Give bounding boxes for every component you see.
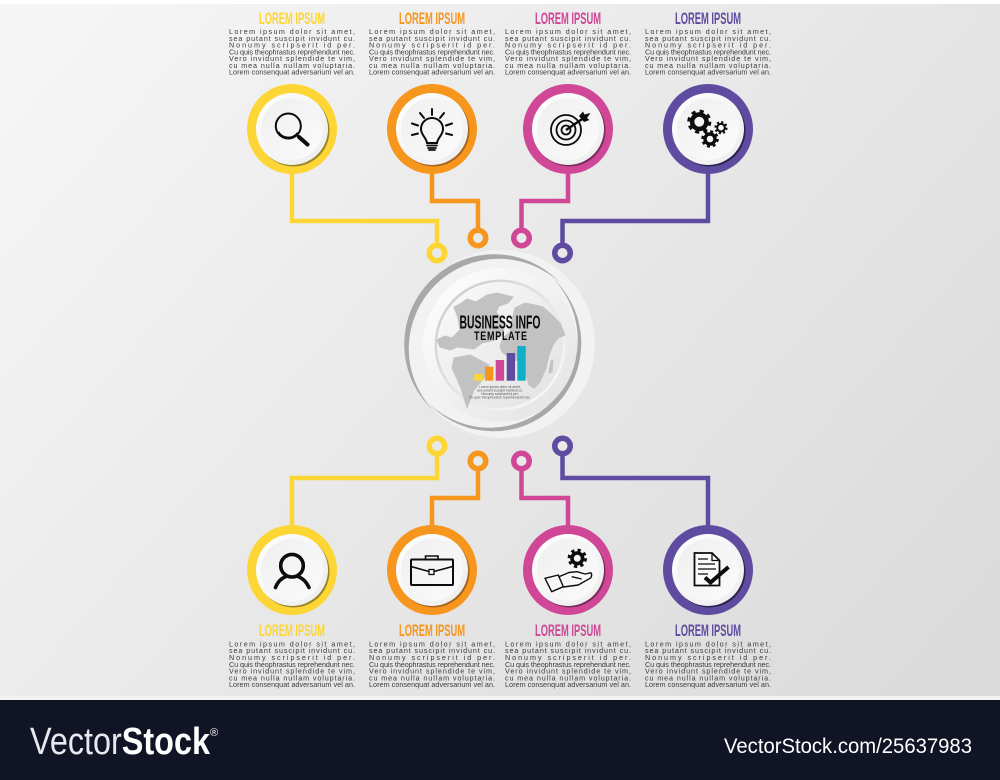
text block: top 2: Lorem ipsum dolor sit amet,	[369, 27, 495, 36]
node: briefcase	[387, 525, 477, 615]
icon: target and arrow	[551, 112, 590, 145]
text block: bottom 1: cu mea nulla nullam voluptaria.	[229, 673, 355, 682]
headings: bottom row	[259, 622, 741, 640]
headings: top row: LOREM IPSUM	[259, 10, 325, 28]
text block: top 2	[369, 27, 495, 76]
node: target	[523, 84, 613, 174]
text block: top 3: Lorem ipsum dolor sit amet,	[505, 27, 631, 36]
text block: bottom 1	[229, 640, 355, 689]
text block: top 2: Lorem consenquat adversarium vel an.	[369, 68, 495, 76]
headings: top row: LOREM IPSUM	[675, 10, 741, 28]
text block: bottom 4: sea putant suscipit invidunt cu.	[645, 646, 771, 655]
text block: bottom 3: Lorem ipsum dolor sit amet,	[505, 640, 631, 648]
text block: top 2: sea putant suscipit invidunt cu.	[369, 34, 495, 43]
node: service hand	[523, 525, 613, 615]
text block: top 3: Lorem consenquat adversarium vel an.	[505, 68, 631, 76]
text block: bottom 4: cu mea nulla nullam voluptaria.	[645, 673, 771, 682]
hub caption: Nonumy scripserit id per.	[481, 392, 519, 396]
text block: top 2: Nonumy scripserit id per.	[369, 40, 495, 50]
text block: bottom 4: Nonumy scripserit id per.	[645, 653, 771, 662]
text block: bottom 2: Vero invidunt splendide te vim,	[369, 666, 495, 676]
text block: top 1: cu mea nulla nullam voluptaria.	[229, 61, 355, 70]
registered mark: ®	[210, 727, 218, 739]
node: document check	[663, 525, 753, 615]
text block: top 3: Vero invidunt splendide te vim,	[505, 54, 631, 63]
hub caption: sea putant suscipit invidunt cu.	[477, 388, 523, 392]
node: person	[247, 525, 337, 615]
footer id: VectorStock.com/25637983	[724, 735, 972, 758]
footer logo: VectorStock	[30, 721, 211, 763]
text block: top 1: Lorem consenquat adversarium vel an.	[229, 68, 355, 76]
text block: bottom 3: cu mea nulla nullam voluptaria.	[505, 673, 631, 682]
headings: bottom row: LOREM IPSUM	[675, 622, 741, 640]
icon: light bulb	[412, 109, 452, 150]
node: settings	[663, 84, 753, 174]
text block: top 3: Cu quis theophrastus reprehendunt nec.	[505, 47, 631, 56]
headings: bottom row: LOREM IPSUM	[535, 622, 601, 640]
text block: bottom 3: sea putant suscipit invidunt cu.	[505, 646, 631, 655]
text block: bottom 2: Lorem ipsum dolor sit amet,	[369, 640, 495, 648]
subtitle: TEMPLATE	[474, 331, 527, 343]
text block: top 4: cu mea nulla nullam voluptaria.	[645, 61, 771, 70]
text block: bottom 2: Cu quis theophrastus reprehendunt nec.	[369, 660, 495, 669]
text block: top 1: Lorem ipsum dolor sit amet,	[229, 27, 355, 36]
text block: top 3: sea putant suscipit invidunt cu.	[505, 34, 631, 43]
text block: bottom 3: Lorem consenquat adversarium vel an.	[505, 680, 631, 689]
node: search	[247, 84, 337, 174]
text block: bottom 1: Vero invidunt splendide te vim,	[229, 666, 355, 676]
text block: bottom 2: Lorem consenquat adversarium vel an.	[369, 680, 495, 689]
text block: top 4: sea putant suscipit invidunt cu.	[645, 34, 771, 43]
text block: bottom 1: Cu quis theophrastus reprehendunt nec.	[229, 660, 355, 669]
text block: bottom 4: Lorem ipsum dolor sit amet,	[645, 640, 771, 648]
text block: top 3: cu mea nulla nullam voluptaria.	[505, 61, 631, 70]
text block: bottom 2: sea putant suscipit invidunt cu.	[369, 646, 495, 655]
text block: bottom 1: Nonumy scripserit id per.	[229, 653, 355, 662]
icon: gears	[689, 111, 727, 146]
title: BUSINESS INFO	[460, 312, 540, 332]
bar chart	[474, 346, 526, 381]
text block: top 1: sea putant suscipit invidunt cu.	[229, 34, 355, 43]
text block: bottom 1: sea putant suscipit invidunt cu.	[229, 646, 355, 655]
text block: bottom 1: Lorem consenquat adversarium vel an.	[229, 680, 355, 689]
text block: top 1: Cu quis theophrastus reprehendunt nec.	[229, 47, 355, 56]
text block: top 4: Cu quis theophrastus reprehendunt nec.	[645, 47, 771, 56]
text block: top 1	[229, 27, 355, 76]
text block: top 3	[505, 27, 631, 76]
hub caption: Cu quis theophrastus reprehendunt nec.	[469, 396, 531, 400]
text block: bottom 4: Vero invidunt splendide te vim,	[645, 666, 771, 676]
text block: bottom 3	[505, 640, 631, 689]
text block: bottom 4: Cu quis theophrastus reprehendunt nec.	[645, 660, 771, 669]
text block: top 4	[645, 27, 771, 76]
footer bar	[0, 696, 1000, 780]
connectors: top	[292, 170, 708, 245]
text block: top 1: Vero invidunt splendide te vim,	[229, 54, 355, 63]
text block: bottom 3: Nonumy scripserit id per.	[505, 653, 631, 662]
text block: bottom 1: Lorem ipsum dolor sit amet,	[229, 640, 355, 648]
text block: top 2: cu mea nulla nullam voluptaria.	[369, 61, 495, 70]
text block: bottom 3: Vero invidunt splendide te vim,	[505, 666, 631, 676]
central hub	[404, 250, 595, 438]
text block: bottom 3: Cu quis theophrastus reprehendunt nec.	[505, 660, 631, 669]
headings: top row	[259, 10, 741, 28]
text block: top 4: Lorem consenquat adversarium vel an.	[645, 68, 771, 76]
text block: bottom 2: Nonumy scripserit id per.	[369, 653, 495, 662]
icon: person	[276, 554, 309, 588]
hub caption: Lorem ipsum dolor sit amet,	[479, 385, 521, 389]
icon: briefcase	[411, 556, 453, 585]
headings: bottom row: LOREM IPSUM	[259, 622, 325, 640]
text block: top 4: Vero invidunt splendide te vim,	[645, 54, 771, 63]
text block: bottom 4	[645, 640, 771, 689]
text block: top 4: Nonumy scripserit id per.	[645, 40, 771, 50]
headings: top row: LOREM IPSUM	[399, 10, 465, 28]
text block: top 4: Lorem ipsum dolor sit amet,	[645, 27, 771, 36]
headings: bottom row: LOREM IPSUM	[399, 622, 465, 640]
text block: bottom 4: Lorem consenquat adversarium vel an.	[645, 680, 771, 689]
node: idea	[387, 84, 477, 174]
text block: bottom 2: cu mea nulla nullam voluptaria.	[369, 673, 495, 682]
text block: bottom 2	[369, 640, 495, 689]
connectors: bottom	[292, 455, 708, 528]
text block: top 3: Nonumy scripserit id per.	[505, 40, 631, 50]
headings: top row: LOREM IPSUM	[535, 10, 601, 28]
icon: document with check	[694, 553, 728, 586]
hub caption	[469, 385, 531, 400]
text block: top 2: Cu quis theophrastus reprehendunt nec.	[369, 47, 495, 56]
text block: top 2: Vero invidunt splendide te vim,	[369, 54, 495, 63]
globe	[437, 282, 565, 408]
icon: magnifier	[276, 114, 308, 144]
icon: hand with gear	[545, 550, 592, 592]
connector end rings	[429, 230, 570, 469]
text block: top 1: Nonumy scripserit id per.	[229, 40, 355, 50]
